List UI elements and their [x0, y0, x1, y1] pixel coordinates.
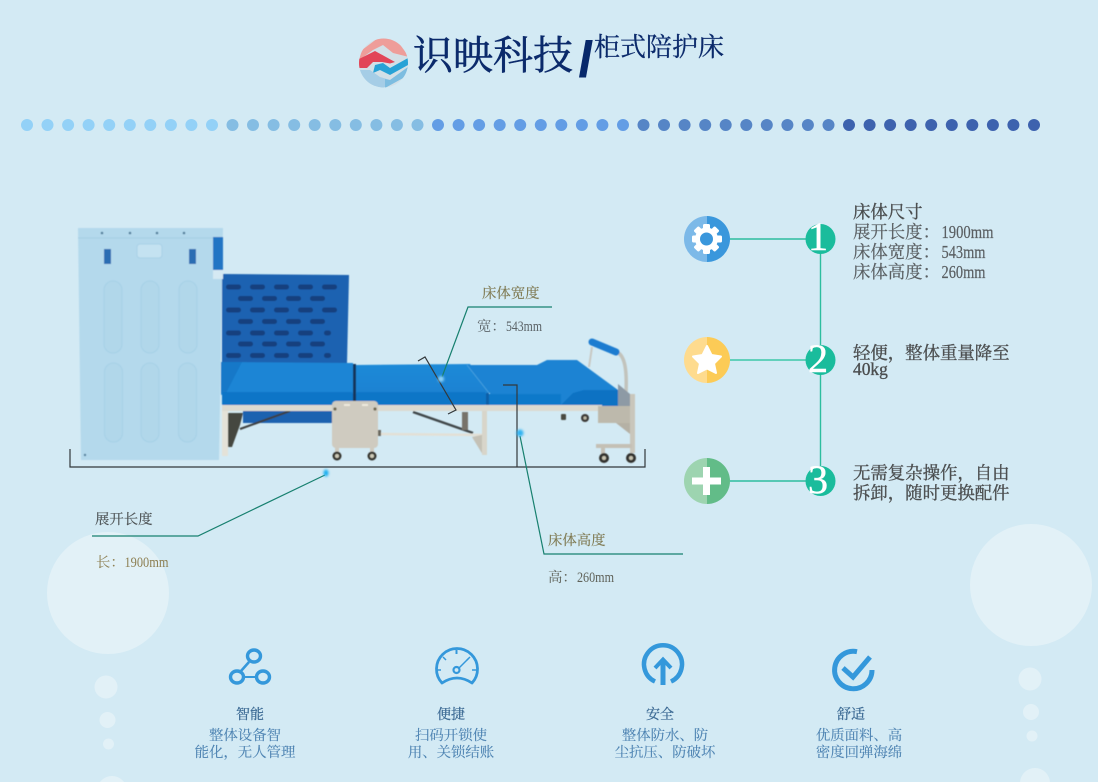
feature: comfortable: 舒适: [837, 707, 865, 723]
callout: bed height: [516, 430, 683, 586]
feature: safe: 整体防水、防: [622, 726, 708, 744]
step 3 badge: 3: [808, 457, 828, 502]
icon: upload arrow: [644, 645, 682, 685]
text: bed dimensions: 床体高度：: [853, 262, 940, 282]
feature: convenient: 扫码开锁使: [415, 726, 487, 744]
bed illustration: [78, 228, 636, 463]
text: lightweight: 40kg: [853, 359, 888, 379]
text: easy removal: [853, 463, 1010, 503]
logo: [359, 38, 409, 88]
step 2 badge: 2: [808, 336, 828, 381]
callout: bed height: 260mm: [577, 570, 614, 586]
head frame with rail and casters: [561, 342, 636, 463]
icon: gauge: [436, 649, 478, 683]
feature: safe: 安全: [646, 707, 674, 723]
text: bed dimensions: 260mm: [942, 262, 986, 282]
mattress three: [467, 360, 618, 406]
feature: smart: [195, 706, 296, 761]
icon: gear: [684, 216, 730, 262]
icon: star: [684, 337, 730, 383]
feature: convenient: 用、关锁结账: [408, 743, 494, 761]
icon: network: [230, 650, 270, 683]
callout: bed width: 床体宽度: [482, 284, 540, 302]
feature: smart: 整体设备智: [209, 726, 281, 744]
step 1 badge: [806, 214, 836, 259]
callout: bed width: [438, 284, 552, 382]
callout: bed height: 高：: [548, 568, 577, 586]
text: bed dimensions: 床体宽度：: [853, 242, 940, 262]
text: easy removal: 拆卸，随时更换配件: [853, 483, 1010, 503]
bed frame rail: [222, 405, 602, 411]
feature: safe: [615, 707, 716, 761]
feature: smart: 能化，无人管理: [195, 744, 296, 761]
background circles right: [970, 524, 1092, 782]
text: bed dimensions: 543mm: [942, 242, 986, 262]
text: lightweight: [853, 343, 1010, 379]
folded cabinet panel: [78, 228, 223, 460]
dotted divider: [21, 119, 1040, 131]
callout: bed height: 床体高度: [548, 531, 606, 549]
step 3 badge: [806, 457, 836, 502]
icon: check mark: [835, 651, 872, 689]
width marker: [418, 357, 456, 414]
step 1 badge: 1: [808, 214, 828, 259]
callout: unfolded length: 长：: [96, 554, 125, 571]
text: bed dimensions: 床体尺寸: [853, 202, 923, 222]
title: [413, 33, 724, 78]
connector lines: [730, 239, 820, 481]
feature: smart: 智能: [236, 706, 264, 723]
step 2 badge: [806, 336, 836, 381]
text: easy removal: 无需复杂操作，自由: [853, 463, 1010, 483]
title: 识映科技: [413, 33, 573, 78]
callout: unfolded length: [92, 470, 328, 571]
callout: bed width: 宽：: [477, 318, 506, 335]
text: bed dimensions: 展开长度：: [853, 222, 940, 242]
height marker: [503, 385, 517, 467]
side plate with casters: [332, 401, 378, 460]
feature: comfortable: 优质面料、高: [816, 726, 902, 744]
mattress two: [353, 364, 492, 406]
feature: convenient: [408, 706, 494, 761]
icon: plus: [684, 458, 730, 504]
title slash: [579, 40, 593, 78]
left leg: [222, 410, 290, 456]
feature: safe: 尘抗压、防破坏: [615, 744, 716, 761]
back panel with slots: [222, 274, 349, 363]
text: lightweight: 轻便，整体重量降至: [853, 343, 1010, 363]
folding strut: [376, 411, 487, 455]
feature: convenient: 便捷: [437, 706, 465, 723]
mattress one: [221, 362, 354, 406]
text: bed dimensions: 1900mm: [942, 222, 994, 242]
title: 柜式陪护床: [594, 33, 724, 62]
dimension bracket: [70, 357, 645, 467]
under-bed panel: [243, 410, 333, 423]
callout: unfolded length: 1900mm: [124, 555, 168, 571]
callout: unfolded length: 展开长度: [95, 510, 153, 528]
background circles left: [47, 532, 169, 782]
text: bed dimensions: [853, 202, 994, 282]
feature: comfortable: [816, 707, 902, 761]
feature: comfortable: 密度回弹海绵: [816, 743, 902, 761]
callout: bed width: 543mm: [506, 319, 542, 335]
